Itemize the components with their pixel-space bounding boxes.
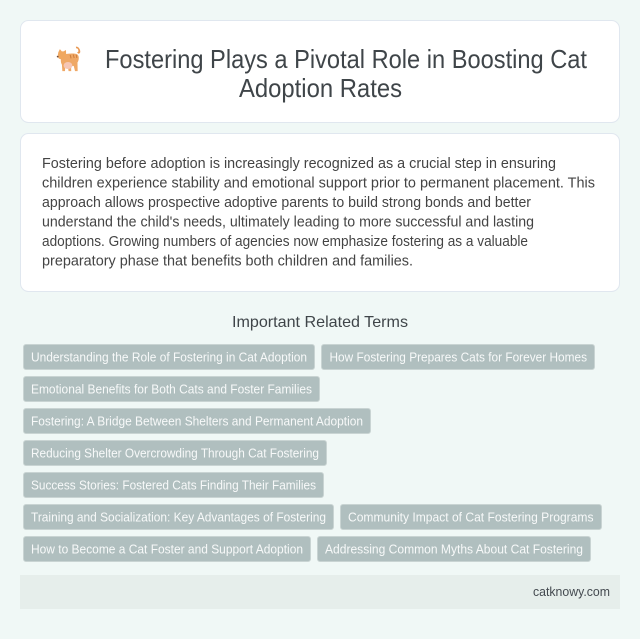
tag: Fostering: A Bridge Between Shelters and Permanent Adoption bbox=[31, 414, 363, 428]
tag bbox=[24, 504, 334, 530]
description text: Fostering before adoption is increasingly recognized as a crucial step in ensuring bbox=[42, 156, 556, 172]
tag: Success Stories: Fostered Cats Finding Their Families bbox=[31, 478, 316, 492]
tag bbox=[24, 344, 314, 370]
heading: related terms: Important Related Terms bbox=[232, 314, 408, 331]
footer bbox=[20, 575, 620, 609]
tag: Community Impact of Cat Fostering Programs bbox=[348, 510, 594, 524]
tag bbox=[24, 440, 326, 466]
tag: Training and Socialization: Key Advantages of Fostering bbox=[31, 510, 326, 524]
description text: adoptions. Growing numbers of agencies now emphasize fostering as a valuable bbox=[42, 234, 528, 250]
tag bbox=[322, 344, 594, 370]
tag bbox=[24, 408, 370, 434]
description text: understand the child's needs, ultimately leading to more successful and lasting bbox=[42, 214, 534, 230]
tag: Reducing Shelter Overcrowding Through Cat Fostering bbox=[31, 446, 319, 460]
tag bbox=[24, 536, 310, 562]
tag: How Fostering Prepares Cats for Forever Homes bbox=[330, 350, 587, 364]
footer site name: catknowy.com bbox=[533, 584, 610, 599]
description text: approach allows prospective adoptive parents to build strong bonds and better bbox=[42, 195, 531, 211]
tag bbox=[24, 472, 324, 498]
panel: description bbox=[20, 134, 620, 292]
title text bbox=[105, 44, 588, 103]
description text bbox=[42, 156, 595, 270]
icon: cat bbox=[57, 47, 80, 71]
tag: Addressing Common Myths About Cat Fostering bbox=[325, 542, 583, 556]
tag bbox=[24, 376, 320, 402]
panel: related term tags bbox=[24, 344, 602, 562]
tag: How to Become a Cat Foster and Support Adoption bbox=[31, 542, 303, 556]
tag bbox=[340, 504, 602, 530]
description text: children experience stability and emotional support prior to permanent placement. This bbox=[42, 176, 595, 192]
tag: Emotional Benefits for Both Cats and Foster Families bbox=[31, 382, 312, 396]
title text: Adoption Rates bbox=[239, 73, 402, 103]
description text: preparatory phase that benefits both children and families. bbox=[42, 254, 413, 270]
panel: title card bbox=[20, 20, 620, 122]
title text: Fostering Plays a Pivotal Role in Boosting Cat bbox=[105, 44, 588, 74]
tag: Understanding the Role of Fostering in Cat Adoption bbox=[31, 350, 307, 364]
tag bbox=[318, 536, 590, 562]
